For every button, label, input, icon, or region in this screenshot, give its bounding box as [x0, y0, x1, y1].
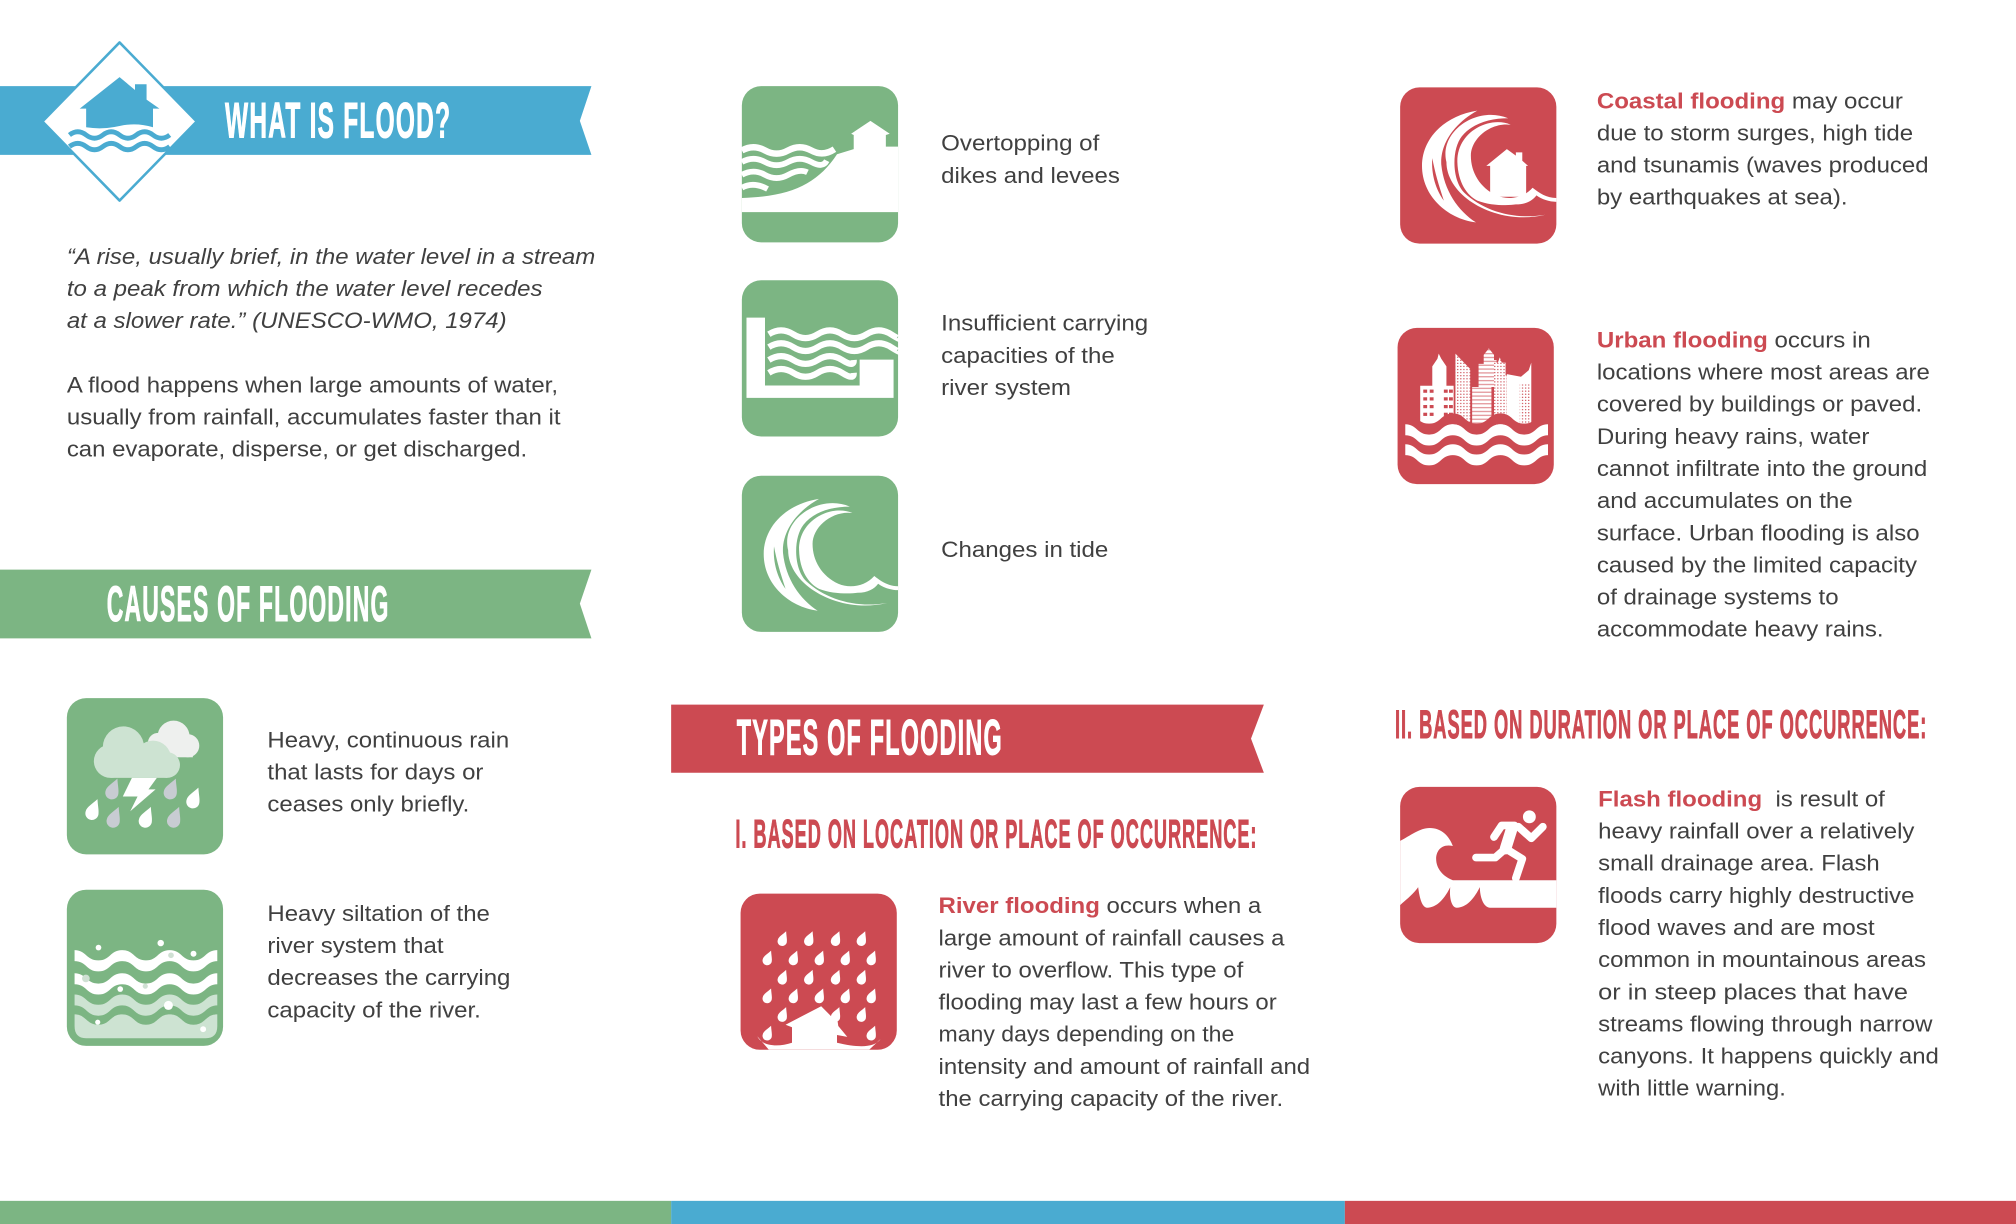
text block: quote definition: “A rise, usually brief, in the water level in a stream [67, 244, 595, 269]
text: flash flooding: common in mountainous areas [1598, 947, 1926, 972]
text: siltation cause: decreases the carrying [267, 965, 510, 990]
text: river flooding: intensity and amount of rainfall and [939, 1054, 1310, 1079]
icon: urban flooding [1398, 328, 1554, 484]
text: urban flooding: of drainage systems to [1597, 585, 1839, 610]
text: coastal flooding [1597, 88, 1929, 210]
text block: flood explanation: A flood happens when large amounts of water, [67, 372, 558, 397]
text block: flood explanation [67, 372, 561, 462]
text: urban flooding: Urban flooding occurs in [1597, 327, 1871, 352]
text: flash flooding: flood waves and are most [1598, 915, 1875, 940]
text: river flooding: river to overflow. This type of [939, 957, 1244, 982]
text block: quote definition: to a peak from which the water level recedes [67, 276, 543, 301]
text: coastal flooding: due to storm surges, high tide [1597, 120, 1913, 145]
footer colour bars [0, 1201, 2016, 1224]
text: changes in tide: Changes in tide [941, 537, 1108, 562]
text: river flooding: the carrying capacity of the river. [939, 1086, 1283, 1111]
ribbon: types of flooding [671, 705, 1264, 773]
text: heavy rain cause: that lasts for days or [267, 759, 484, 784]
text: urban flooding: surface. Urban flooding is also [1597, 520, 1920, 545]
text: urban flooding: accommodate heavy rains. [1597, 617, 1884, 642]
text: urban flooding: covered by buildings or paved. [1597, 392, 1922, 417]
text: siltation cause: river system that [267, 933, 444, 958]
text: siltation cause: Heavy siltation of the [267, 901, 490, 926]
text: insufficient capacity [941, 311, 1148, 400]
text: river flooding: large amount of rainfall causes a [939, 925, 1285, 950]
text: flash flooding: canyons. It happens quickly and [1598, 1044, 1939, 1069]
text: river flooding: flooding may last a few hours or [939, 990, 1277, 1015]
text: insufficient capacity: Insufficient carrying [941, 311, 1148, 336]
icon: river flooding [741, 894, 897, 1050]
ribbon: what is flood [0, 86, 591, 155]
text: urban flooding: During heavy rains, water [1597, 424, 1870, 449]
text: coastal flooding: and tsunamis (waves produced [1597, 153, 1929, 178]
text: insufficient capacity: capacities of the [941, 343, 1115, 368]
text: I. BASED ON LOCATION OR PLACE OF OCCURRENCE: [735, 812, 1257, 856]
text: urban flooding: caused by the limited capacity [1597, 552, 1918, 577]
text: flash flooding: heavy rainfall over a relatively [1598, 819, 1915, 844]
text: urban flooding: and accumulates on the [1597, 488, 1853, 513]
icon: siltation [67, 890, 223, 1046]
text: flash flooding: with little warning. [1597, 1076, 1786, 1101]
text: overtopping [941, 131, 1120, 188]
text: flash flooding [1597, 786, 1939, 1101]
icon: tide wave [742, 476, 898, 632]
text: insufficient capacity: river system [941, 375, 1071, 400]
text: siltation cause: capacity of the river. [267, 997, 481, 1022]
text block: flood explanation: usually from rainfall, accumulates faster than it [67, 405, 561, 430]
text: river flooding: River flooding occurs when a [939, 893, 1262, 918]
icon: house flood diamond [42, 42, 197, 201]
text: heavy rain cause [267, 727, 509, 817]
text: flash flooding: Flash flooding is result of [1598, 786, 1886, 811]
text: flash flooding: small drainage area. Flash [1598, 851, 1880, 876]
text block: flood explanation: can evaporate, disperse, or get discharged. [67, 437, 527, 462]
text block: quote definition: at a slower rate.” (UNESCO-WMO, 1974) [67, 308, 507, 333]
text block: quote definition [67, 244, 595, 333]
ribbon: causes of flooding: CAUSES OF FLOODING [107, 576, 390, 632]
text: urban flooding: locations where most areas are [1597, 360, 1930, 385]
text: heavy rain cause: ceases only briefly. [267, 792, 469, 817]
ribbon: types of flooding: TYPES OF FLOODING [737, 710, 1003, 766]
text: river flooding [939, 893, 1310, 1111]
text: coastal flooding: by earthquakes at sea). [1597, 185, 1848, 210]
text: coastal flooding: Coastal flooding may occur [1597, 88, 1903, 113]
text: overtopping: Overtopping of [941, 131, 1100, 156]
ribbon: what is flood: WHAT IS FLOOD? [225, 93, 451, 149]
text: river flooding: many days depending on the [939, 1022, 1234, 1047]
icon: coastal flooding [1400, 87, 1556, 244]
icon: overtopping dike [742, 86, 898, 242]
icon: heavy rain [67, 698, 223, 854]
icon: flash flooding runner [1400, 787, 1556, 943]
text: urban flooding [1597, 327, 1930, 642]
ribbon: causes of flooding [0, 570, 591, 638]
text: flash flooding: streams flowing through narrow [1598, 1011, 1933, 1036]
icon: insufficient river capacity [742, 280, 900, 436]
text: flash flooding: or in steep places that have [1598, 979, 1908, 1004]
text: urban flooding: cannot infiltrate into the ground [1597, 456, 1927, 481]
text: overtopping: dikes and levees [941, 163, 1120, 188]
text: flash flooding: floods carry highly destructive [1598, 883, 1914, 908]
text: heavy rain cause: Heavy, continuous rain [267, 727, 509, 752]
text: siltation cause [267, 901, 510, 1022]
